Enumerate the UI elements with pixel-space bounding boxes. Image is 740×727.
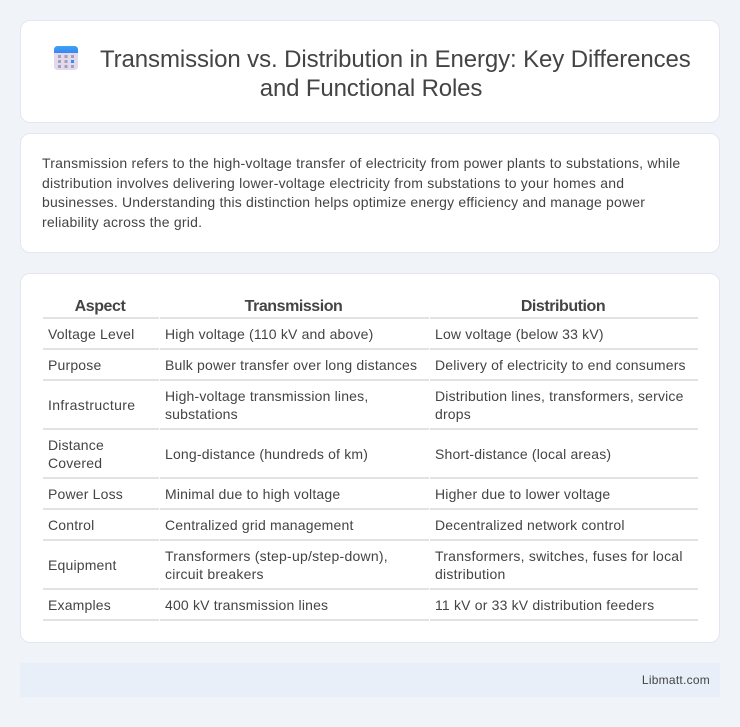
title: and Functional Roles — [260, 75, 482, 102]
text block: intro: reliability across the grid. — [42, 214, 202, 230]
table rows: substations — [165, 406, 238, 422]
table rows: Decentralized network control — [435, 517, 625, 533]
table header — [75, 298, 605, 315]
table rows: Control — [48, 517, 94, 533]
title — [100, 46, 691, 102]
icon: calendar — [54, 46, 78, 70]
table rows: Short-distance (local areas) — [435, 446, 611, 462]
table rows: Purpose — [48, 357, 101, 373]
text block: intro: Transmission refers to the high-voltage transfer of electricity from power plants to substations, while — [42, 155, 680, 171]
title: Transmission vs. Distribution in Energy: Key Differences — [100, 46, 691, 73]
text block: intro — [42, 155, 680, 230]
footer credit: Libmatt.com — [642, 673, 710, 687]
table rows: 400 kV transmission lines — [165, 597, 328, 613]
text block: intro: businesses. Understanding this distinction helps optimize energy efficiency and manage power — [42, 194, 645, 210]
table rows: Voltage Level — [48, 326, 134, 342]
table rows: High-voltage transmission lines, — [165, 388, 368, 404]
table rows: Bulk power transfer over long distances — [165, 357, 417, 373]
table rows: Distance — [48, 437, 104, 453]
table rows: Equipment — [48, 557, 117, 573]
table rows: Examples — [48, 597, 111, 613]
table rows: Power Loss — [48, 486, 123, 502]
table rows: Covered — [48, 455, 102, 471]
table rows: Transformers (step-up/step-down), — [165, 548, 388, 564]
table rows: Long-distance (hundreds of km) — [165, 446, 368, 462]
panel: header — [20, 20, 720, 123]
table rows: drops — [435, 406, 471, 422]
table rows: Higher due to lower voltage — [435, 486, 610, 502]
panel: comparison table — [20, 273, 720, 643]
table rows: Centralized grid management — [165, 517, 354, 533]
table rows: Infrastructure — [48, 397, 135, 413]
text block: intro: distribution involves delivering lower-voltage electricity from substations to your homes and — [42, 175, 624, 191]
table rows — [43, 317, 698, 621]
table rows: Minimal due to high voltage — [165, 486, 340, 502]
table rows: Low voltage (below 33 kV) — [435, 326, 604, 342]
table rows: circuit breakers — [165, 566, 264, 582]
table header: Aspect — [75, 298, 125, 315]
table header: Distribution — [521, 298, 605, 315]
table header: Transmission — [245, 298, 342, 315]
footer — [20, 663, 720, 697]
table rows: Delivery of electricity to end consumers — [435, 357, 686, 373]
table rows: distribution — [435, 566, 506, 582]
panel: introduction — [20, 133, 720, 253]
table rows: 11 kV or 33 kV distribution feeders — [435, 597, 654, 613]
table rows: Distribution lines, transformers, service — [435, 388, 684, 404]
table rows: Transformers, switches, fuses for local — [435, 548, 683, 564]
table rows: High voltage (110 kV and above) — [165, 326, 373, 342]
